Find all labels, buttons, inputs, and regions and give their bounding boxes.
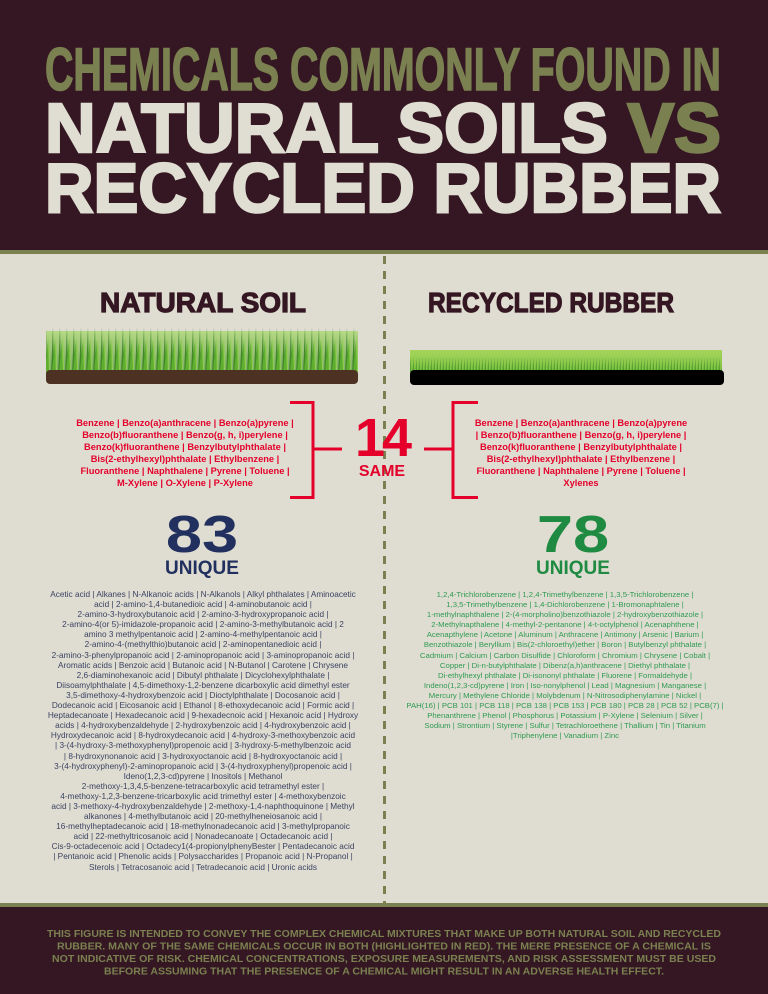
- text block: recycled rubber unique list: [406, 590, 724, 740]
- text block: recycled rubber unique list: Mercury | Methylene Chloride | Molybdenum | N-Nitrosodiphenylamine | Nickel |: [429, 691, 701, 700]
- text block: recycled rubber unique list: |Triphenylene | Vanadium | Zinc: [511, 731, 619, 740]
- footer disclaimer text: [47, 928, 721, 978]
- text block: shared chemicals left: Benzene | Benzo(a)anthracene | Benzo(a)pyrene |: [76, 418, 294, 428]
- callout: 14 same: SAME: [359, 463, 405, 480]
- text block: natural soil unique list: | 3-(4-hydroxy-3-methoxyphenyl)propenoic acid | 3-hydroxy-5-methylbenzoic acid: [55, 741, 351, 750]
- text block: natural soil unique list: 2-methoxy-1,3,4,5-benzene-tetracarboxylic acid tetramethyl ester |: [82, 782, 324, 791]
- text block: natural soil unique list: 3-(4-hydroxyphenyl)-2-aminopropanoic acid | 3-(4-hydroxyphenyl)propenoic acid |: [54, 762, 352, 771]
- text block: recycled rubber unique list: 1-methylnaphthalene | 2-(4-morpholino)benzothiazole | 2-hydroxybenzothiazole |: [427, 610, 703, 619]
- text block: shared chemicals left: Bis(2-ethylhexyl)phthalate | Ethylbenzene |: [91, 454, 279, 464]
- text block: shared chemicals right: Benzo(k)fluoranthene | Benzylbutylphthalate |: [480, 442, 682, 452]
- stat: 78 unique: UNIQUE: [536, 558, 610, 579]
- footer disclaimer text: NOT INDICATIVE OF RISK. CHEMICAL CONCENTRATIONS, EXPOSURE MEASUREMENTS, AND RISK ASSESSMENT MUST BE USED: [52, 953, 716, 965]
- icon: artificial turf: [410, 350, 724, 385]
- text block: recycled rubber unique list: 1,2,4-Trichlorobenzene | 1,2,4-Trimethylbenzene | 1,3,5-Trichlorobenzene |: [437, 590, 693, 599]
- footer: [0, 903, 768, 994]
- text block: shared chemicals left: [76, 418, 294, 488]
- text block: shared chemicals right: Bis(2-ethylhexyl)phthalate | Ethylbenzene |: [487, 454, 675, 464]
- text block: shared chemicals right: [475, 418, 687, 488]
- text block: recycled rubber unique list: Phenanthrene | Phenol | Phosphorus | Potassium | P-Xylene | Selenium | Silver |: [427, 711, 703, 720]
- stat: 83 unique: 83: [166, 506, 238, 564]
- text block: natural soil unique list: Heptadecanoate | Hexadecanoic acid | 9-hexadecnoic acid | Hexanoic acid | Hydroxy: [48, 711, 358, 720]
- stat: 83 unique: UNIQUE: [165, 558, 239, 579]
- text block: natural soil unique list: acid | 2-amino-1,4-butanedioic acid | 4-aminobutanoic acid |: [94, 600, 312, 609]
- text block: natural soil unique list: 2-amino-4-(methylthio)butanoic acid | 2-aminopentanedioic acid |: [85, 640, 321, 649]
- text block: natural soil unique list: Ideno(1,2,3-cd)pyrene | Inositols | Methanol: [124, 772, 282, 781]
- text block: natural soil unique list: 4-methoxy-1,2,3-benzene-tricarboxylic acid trimethyl ester | 4-methoxybenzoic: [60, 792, 346, 801]
- footer disclaimer text: THIS FIGURE IS INTENDED TO CONVEY THE COMPLEX CHEMICAL MIXTURES THAT MAKE UP BOTH NATURAL SOIL AND RECYCLED: [47, 928, 721, 940]
- title: [45, 36, 722, 227]
- callout: 14 same: 14: [355, 408, 409, 468]
- text block: natural soil unique list: | Pentanoic acid | Phenolic acids | Polysaccharides | Propanoic acid | N-Propanol |: [53, 852, 353, 861]
- bracket left: [290, 401, 342, 499]
- text block: recycled rubber unique list: Copper | Di-n-butylphthalate | Dibenz(a,h)anthracene | Diethyl phthalate |: [440, 661, 690, 670]
- text block: natural soil unique list: Cis-9-octadecenoic acid | Octadecy1(4-propionylphenyBester | Pentadecanoic acid: [52, 842, 354, 851]
- text block: recycled rubber unique list: 1,3,5-Trimethylbenzene | 1,4-Dichlorobenzene | 1-Bromonaphtalene |: [446, 600, 684, 609]
- text block: shared chemicals left: Benzo(k)fluoranthene | Benzylbutylphthalate |: [84, 442, 286, 452]
- header: [0, 0, 768, 254]
- text block: recycled rubber unique list: 2-Methylnapthalene | 4-methyl-2-pentanone | 4-t-octylphenol | Acenaphthene |: [431, 620, 699, 629]
- text block: recycled rubber unique list: Benzothiazole | Beryllium | Bis(2-chloroethyl)ether | Boron | Butylbenzyl phthalate |: [424, 640, 706, 649]
- text block: natural soil unique list: Aromatic acids | Benzoic acid | Butanoic acid | N-Butanol | Carotene | Chrysene: [58, 661, 348, 670]
- text block: natural soil unique list: 16-methylheptadecanoic acid | 18-methylnonadecanoic acid | 3-methylpropanoic: [56, 822, 350, 831]
- text block: recycled rubber unique list: Cadmium | Calcium | Carbon Disulfide | Chloroform | Chromium | Chrysene | Cobalt |: [420, 651, 710, 660]
- text block: natural soil unique list: Dodecanoic acid | Eicosanoic acid | Ethanol | 8-ethoxydecanoic acid | Formic acid |: [52, 701, 354, 710]
- text block: shared chemicals right: Fluoranthene | Naphthalene | Pyrene | Toluene |: [476, 466, 686, 476]
- footer disclaimer text: RUBBER. MANY OF THE SAME CHEMICALS OCCUR IN BOTH (HIGHLIGHTED IN RED). THE MERE PRESENCE OF A CHEMICAL IS: [57, 940, 711, 952]
- icon: natural grass: [46, 328, 358, 384]
- text block: shared chemicals right: | Benzo(b)fluoranthene | Benzo(g, h, i)perylene |: [476, 430, 686, 440]
- text block: recycled rubber unique list: Di-ethylhexyl phthalate | Di-isononyl phthalate | Fluorene | Formaldehyde |: [438, 671, 692, 680]
- text block: natural soil unique list: Sterols | Tetracosanoic acid | Tetradecanoic acid | Uronic acids: [89, 863, 317, 872]
- text block: shared chemicals left: M-Xylene | O-Xylene | P-Xylene: [117, 478, 253, 488]
- bracket right: [424, 401, 478, 499]
- text block: natural soil unique list: 2,6-diaminohexanoic acid | Dibutyl phthalate | Dicyclohexylphthalate |: [77, 671, 329, 680]
- text block: shared chemicals right: Benzene | Benzo(a)anthracene | Benzo(a)pyrene: [475, 418, 687, 428]
- text block: recycled rubber unique list: Sodium | Strontium | Styrene | Sulfur | Tetrachloroethene | Thallium | Tin | Titanium: [424, 721, 706, 730]
- footer disclaimer text: BEFORE ASSUMING THAT THE PRESENCE OF A CHEMICAL MIGHT RESULT IN AN ADVERSE HEALTH EFFECT.: [104, 966, 664, 978]
- text block: natural soil unique list: alkanones | 4-methylbutanoic acid | 20-methylheneiosanoic acid |: [84, 812, 322, 821]
- text block: natural soil unique list: | 8-hydroxynonanoic acid | 3-hydroxyoctanoic acid | 8-hydroxyoctanoic acid |: [64, 752, 342, 760]
- text block: recycled rubber unique list: PAH(16) | PCB 101 | PCB 118 | PCB 138 | PCB 153 | PCB 180 | PCB 28 | PCB 52 | PCB(7) |: [406, 701, 724, 710]
- text block: natural soil unique list: acid | 22-methyltricosanoic acid | Nonadecanoate | Octadecanoic acid |: [74, 832, 332, 841]
- text block: natural soil unique list: acids | 4-hydroxybenzaldehyde | 2-hydroxybenzoic acid | 4-hydroxybenzoic acid |: [55, 721, 351, 730]
- title: RECYCLED RUBBER: [45, 149, 721, 227]
- text block: shared chemicals right: Xylenes: [563, 478, 599, 488]
- text block: recycled rubber unique list: Acenapthylene | Acetone | Aluminum | Anthracene | Antimony | Arsenic | Barium |: [427, 630, 703, 639]
- text block: natural soil unique list: 3,5-dimethoxy-4-hydroxybenzoic acid | Dioctylphthalate | Docosanoic acid |: [66, 691, 340, 700]
- stat: 78 unique: 78: [537, 506, 609, 564]
- text block: natural soil unique list: [48, 590, 358, 872]
- text block: shared chemicals left: Fluoranthene | Naphthalene | Pyrene | Toluene |: [80, 466, 290, 476]
- text block: natural soil unique list: acid | 3-methoxy-4-hydroxybenzaldehyde | 2-methoxy-1,4-naphthoquinone | Methyl: [51, 802, 355, 811]
- text block: natural soil unique list: Hydroxydecanoic acid | 8-hydroxydecanoic acid | 4-hydroxy-3-methoxybenzoic acid: [51, 731, 355, 740]
- text block: natural soil unique list: 2-amino-3-phenylpropanoic acid | 2-aminopropanoic acid | 3-aminopropanoic acid |: [52, 651, 354, 660]
- title: NATURAL SOILS VS: [45, 89, 721, 167]
- text block: recycled rubber unique list: Indeno(1,2,3-cd)pyrene | Iron | Iso-nonylphenol | Lead | Magnesium | Manganese |: [424, 681, 706, 690]
- text block: natural soil unique list: 2-amino-4(or 5)-imidazole-propanoic acid | 2-amino-3-methylbutanoic acid | 2: [62, 620, 344, 629]
- divider: [383, 256, 386, 904]
- text block: natural soil unique list: Diisoamylphthalate | 4,5-dimethoxy-1,2-benzene dicarboxylic acid dimethyl ester: [56, 681, 350, 690]
- text block: natural soil unique list: 2-amino-3-hydroxybutanoic acid | 2-amino-3-hydroxypropanoic acid |: [78, 610, 328, 619]
- text block: natural soil unique list: Acetic acid | Alkanes | N-Alkanoic acids | N-Alkanols | Alkyl phthalates | Aminoacetic: [50, 590, 356, 599]
- text block: natural soil unique list: amino 3 methylpentanoic acid | 2-amino-4-methylpentanoic acid |: [84, 630, 322, 639]
- text block: shared chemicals left: Benzo(b)fluoranthene | Benzo(g, h, i)perylene |: [82, 430, 288, 440]
